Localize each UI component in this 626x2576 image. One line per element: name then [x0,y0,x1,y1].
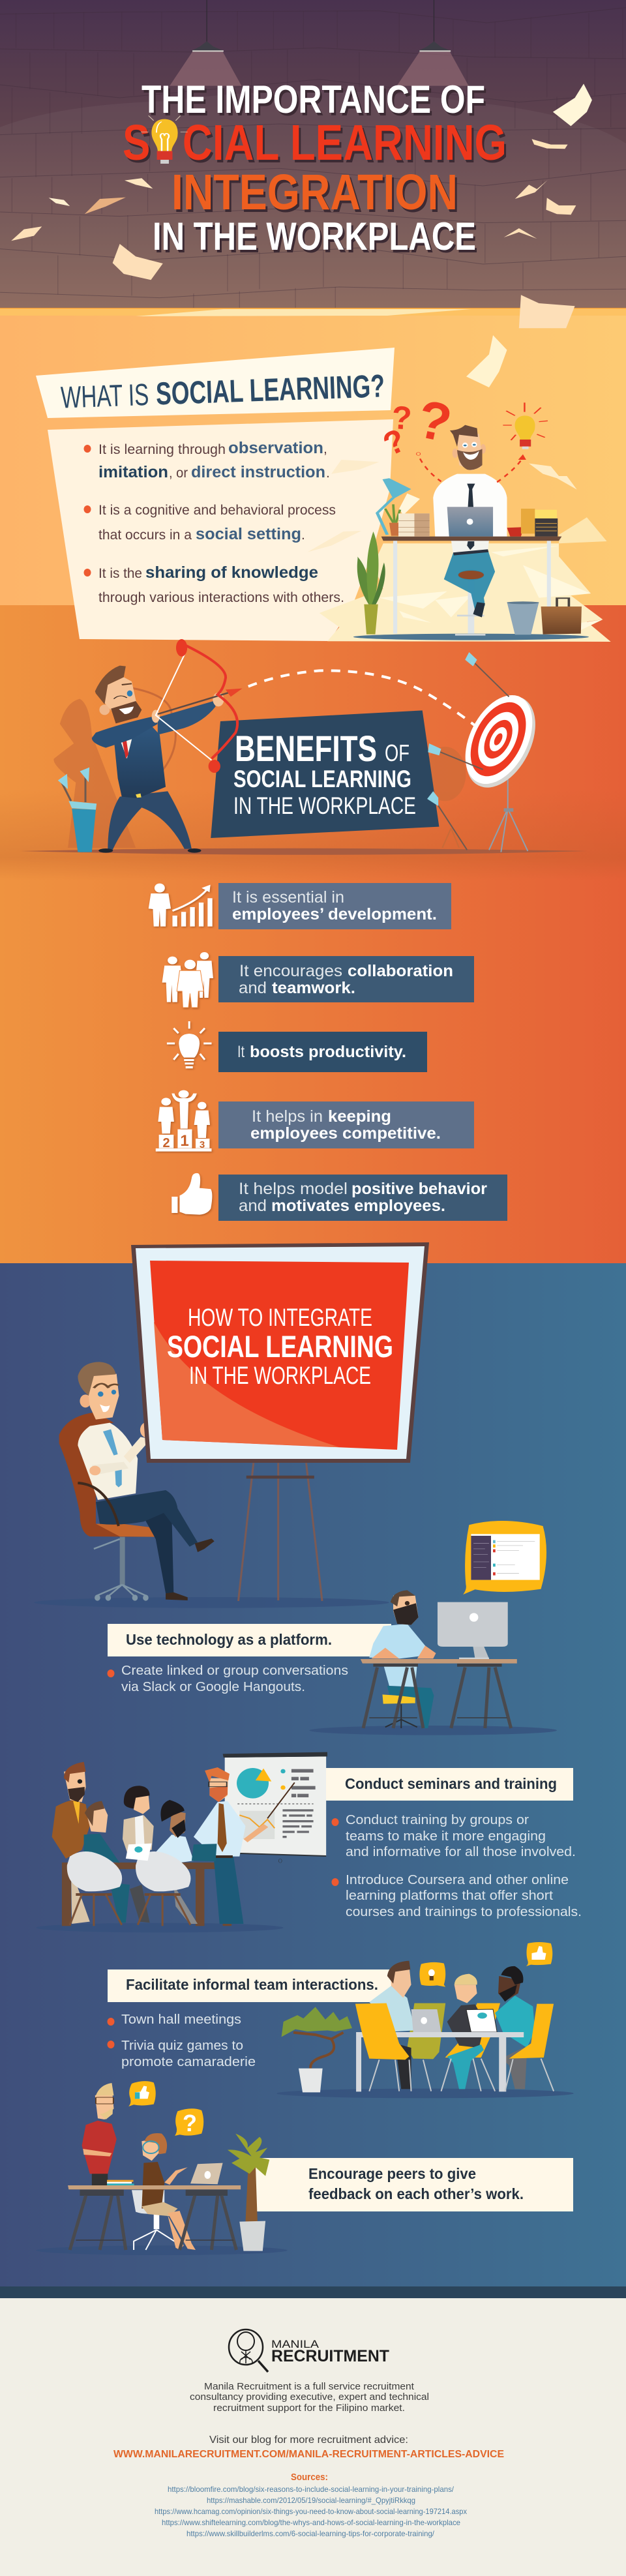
flying papers [11,83,592,328]
logo: RECRUITMENT [271,2347,389,2365]
bullets: seminars [331,1813,582,1919]
orange section background [0,605,626,1264]
presentation board [223,1752,327,1863]
shirt and tie [78,1423,138,1500]
heading: how to integrate: HOW TO INTEGRATE [188,1304,372,1332]
benefit 3: boosts productivity. [250,1043,406,1061]
bullets: informal interactions: Town hall meetings [121,2013,241,2027]
illustration: man at computer [309,1590,557,1735]
bullet: social setting: that occurs in a [98,528,192,543]
benefit 1: employees’ development. [232,905,437,923]
desk [381,537,561,634]
bullet: observation: observation [228,439,323,457]
panel: what is social learning heading: SOCIAL LEARNING? [155,368,385,412]
sources: https://www.skillbuilderlms.com/6-social-learning-tips-for-corporate-training/ [186,2529,435,2538]
icon: idea bulb [503,402,548,449]
bullet: sharing of knowledge: It is the [98,566,142,581]
icons: question marks: ? [378,421,411,463]
archer head [95,666,142,723]
bullet: observation: imitation [98,463,168,481]
card: use technology: Use technology as a platform. [126,1631,332,1648]
bullet: observation: , [323,442,327,457]
illustration: man at desk with paper pile [320,335,611,642]
icon: target [451,684,550,799]
logo: MANILA [271,2338,320,2350]
panel: header wall [0,0,626,308]
monitor [438,1602,508,1659]
bullets: seminars: Conduct training by groups or [346,1813,529,1827]
card: informal interactions: Facilitate informal team interactions. [126,1976,378,1993]
desk plant [385,504,400,536]
torso [433,474,507,537]
benefit 5: It helps model [239,1180,348,1198]
bullet: social setting: . [301,528,305,543]
card: use technology [108,1624,391,1656]
bullet: observation: It is learning through [98,442,226,457]
seated man [84,1801,130,1923]
bullets: seminars: Introduce Coursera and other online [346,1873,569,1887]
lamp right [397,0,469,86]
heading: benefits: IN THE WORKPLACE [233,792,416,819]
lamp left [170,0,241,86]
bullets: seminars: and informative for all those involved. [346,1845,576,1859]
ground band [0,789,626,880]
benefit 2: collaboration [348,962,453,980]
icon: thumbs up [171,1173,212,1215]
ground shadow [20,848,587,855]
title: INTEGRATION [171,164,458,220]
stray arrows [427,652,509,850]
card: encourage feedback: feedback on each other’s work. [308,2185,524,2202]
sources: https://www.hcamag.com/opinion/six-things-you-need-to-know-about-social-learning-197214.aspx [155,2507,467,2516]
heading: how to integrate: IN THE WORKPLACE [189,1362,371,1390]
bullet: observation: , or [169,466,188,481]
benefit 5 [171,1173,507,1221]
title: SOCIAL LEARNING [123,115,507,171]
panel: how to integrate board [131,1242,429,1463]
desk [68,2185,241,2250]
dashed thought arcs [417,453,526,482]
easel [238,1463,322,1601]
left man [369,1961,415,2089]
standing bearded man [52,1762,90,1859]
briefcase [541,598,582,635]
icons: question marks: ? [412,389,456,454]
chair arm [78,1483,119,1526]
blog call to action: WWW.MANILARECRUITMENT.COM/MANILA-RECRUITMENT-ARTICLES-ADVICE [113,2449,504,2460]
desk lamp [378,478,420,535]
heading: benefits: SOCIAL LEARNING [233,766,411,792]
bullet: sharing of knowledge: through various interactions with others. [98,590,344,605]
egg chairs [67,1851,190,1926]
table and devices [356,2009,524,2091]
bullet: social setting: social setting [196,525,301,543]
icon: person with growth chart [149,884,213,927]
logo magnifier [229,2329,268,2372]
benefit 4: It helps in [252,1107,323,1126]
icon: light bulb [167,1021,211,1068]
card: seminars: Conduct seminars and training [345,1775,557,1792]
front chairs [355,2003,554,2091]
panel: what is social learning heading [36,348,395,418]
chair and woman [132,2133,196,2250]
potted bonsai [282,2007,352,2092]
benefit 4: employees competitive. [250,1124,441,1143]
icon: question in bubble: ? [183,2110,197,2136]
illustration: archer scene [20,639,587,855]
thumb bubble [128,2081,156,2106]
panel: footer [0,2298,626,2576]
laptop [447,507,493,537]
benefit 4: keeping [328,1107,391,1126]
card: informal interactions [108,1969,391,2002]
panel: what is social learning heading: WHAT IS [60,377,149,415]
archer body [92,693,224,853]
panel: benefits heading box [211,710,439,838]
floor shadow [353,634,589,640]
icon: podium [156,1090,211,1152]
icon: podium: 3 [200,1139,205,1150]
panel: what is social learning body [48,419,393,641]
bullets: informal interactions [107,2013,256,2069]
bullet: technology: Create linked or group conversations [121,1664,348,1678]
bullets: seminars: learning platforms that offer short [346,1889,553,1903]
blue section background [0,1263,626,2286]
desk organizer [507,509,558,537]
icon: title light bulb [141,115,188,164]
title: IN THE WORKPLACE [153,215,476,258]
shadow [34,1597,389,1608]
stool and legs [444,540,495,636]
bullet: observation: . [326,466,330,481]
woman [123,1786,154,1923]
palm plant [228,2134,269,2251]
archer shadow [53,688,466,848]
heading: benefits [233,728,416,819]
curly man [156,1800,198,1924]
company description: recruitment support for the Filipino market. [213,2403,405,2414]
benefit 1: It is essential in [232,888,344,906]
blog call to action [113,2434,504,2460]
heading: how to integrate: SOCIAL LEARNING [167,1329,393,1364]
benefit 5: positive behavior [351,1180,487,1198]
head [78,1362,119,1420]
laptop and books [107,2163,223,2185]
icon: podium: 1 [180,1132,189,1150]
company description: consultancy providing executive, expert and technical [190,2391,429,2403]
icons: question marks: ? [391,399,413,437]
benefit 4 [156,1090,474,1152]
legs [96,1490,215,1600]
blog call to action: Visit our blog for more recruitment advice: [209,2434,408,2446]
icons: question marks [378,389,456,463]
bullet: social setting [83,503,336,543]
heading: how to integrate [167,1304,393,1390]
illustration: seminar group [36,1752,327,1932]
title [123,78,507,258]
bullet: technology [107,1664,348,1694]
dashed arrow path [248,670,475,726]
benefit 2: teamwork. [272,979,355,997]
benefit 1 [149,883,451,929]
heading: benefits: OF [385,740,410,766]
question bubble [175,2108,203,2136]
illustration: team meeting [276,1942,574,2098]
book stack [398,513,430,537]
illustration: peer feedback [36,2081,288,2255]
bullets: informal interactions: promote camaraderie [121,2055,256,2069]
heading: benefits: BENEFITS [235,728,377,769]
bullet: observation [83,439,330,481]
benefit 3: It [237,1043,245,1061]
bullet: sharing of knowledge [83,563,344,605]
bullets: seminars: teams to make it more engaging [346,1829,546,1844]
sources: https://mashable.com/2012/05/19/social-learning/#_QpyjtiRkkqg [207,2496,415,2505]
bullets: informal interactions: Trivia quiz games to [121,2039,243,2053]
standing man [82,2083,117,2186]
footer band [0,2286,626,2298]
benefit 3 [167,1021,427,1072]
chair [59,1413,158,1601]
bullet: social setting: It is a cognitive and behavioral process [98,503,336,518]
illustration: presenter with board [34,1362,546,1608]
panel: yellow floor background [0,308,626,605]
desk [361,1659,517,1728]
table [62,1863,231,1926]
company description [190,2381,429,2414]
logo [229,2329,389,2372]
sources: https://www.shiftelearning.com/blog/the-whys-and-hows-of-social-learning-in-the-workplace [162,2518,460,2527]
right man [495,1966,535,2089]
laptops on table [126,1844,216,1861]
title: THE IMPORTANCE OF [142,78,485,121]
icon: team of three [162,952,213,1008]
bow and arrow [156,639,243,773]
sources [155,2472,467,2538]
bullet: observation: direct instruction [191,463,325,481]
pointing arm [124,1414,155,1463]
woman [447,1974,485,2089]
benefit 2: and [239,979,267,997]
company description: Manila Recruitment is a full service recruitment [204,2381,415,2392]
benefit 5: and [239,1197,267,1215]
card: encourage feedback [252,2158,573,2211]
tripod [489,774,528,852]
bullet: sharing of knowledge: sharing of knowledge [145,563,318,582]
card: encourage feedback: Encourage peers to give [308,2165,476,2182]
thumb bubble [526,1942,552,1966]
bullets: seminars: courses and trainings to professionals. [346,1905,582,1919]
benefit 2: It encourages [239,962,342,980]
presenter [194,1767,295,1924]
bullet: technology: via Slack or Google Hangouts. [121,1680,305,1694]
sources: https://bloomfire.com/blog/six-reasons-to-include-social-learning-in-your-training-plans/ [168,2485,455,2494]
slack bubble [463,1521,546,1595]
idea bubble [419,1962,445,1987]
sources: Sources: [291,2472,328,2483]
head [450,425,486,471]
icon: podium: 2 [162,1136,170,1150]
man torso and head [369,1590,436,1658]
benefit 5: motivates employees. [271,1197,445,1215]
waste bin [507,601,539,635]
floor glow [0,308,626,316]
quiver [58,768,97,852]
card: seminars [326,1768,573,1801]
tall plant [357,532,385,635]
chairs back [407,2003,500,2059]
benefit 2 [162,952,474,1008]
